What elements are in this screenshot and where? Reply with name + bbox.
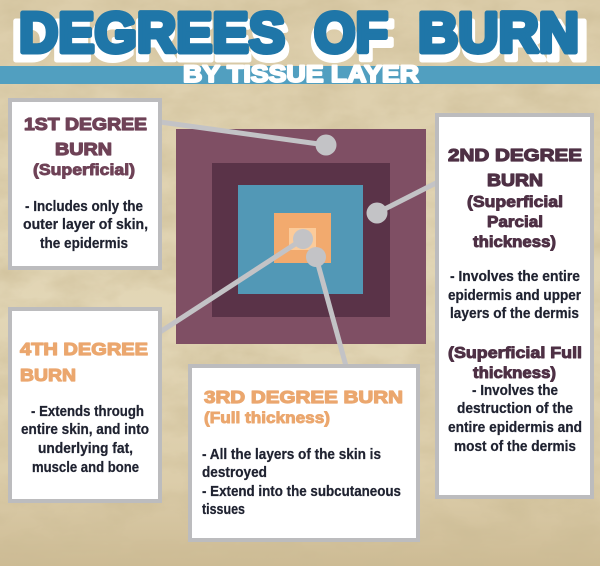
- title: DEGREES: [12, 9, 289, 73]
- panel: 4th degree burn: [10, 309, 160, 501]
- body text: full thickness: - Involves the: [472, 383, 558, 399]
- body text: partial thickness: layers of the dermis: [450, 306, 579, 322]
- body text: full thickness: entire epidermis and: [448, 420, 582, 436]
- body text: 3rd degree: - Extend into the subcutaneous: [202, 484, 401, 500]
- body text: 4th degree: entire skin, and into: [21, 422, 149, 438]
- body text: partial thickness: - Involves the entire: [450, 269, 580, 285]
- body text: 3rd degree: destroyed: [202, 465, 267, 481]
- title: BURN: [418, 9, 588, 73]
- body text: full thickness: [448, 383, 582, 455]
- heading: 4th degree: [20, 339, 148, 385]
- panel: 1st degree burn: [10, 100, 160, 268]
- body text: 3rd degree: tissues: [202, 502, 245, 518]
- heading: 4th degree: 4TH DEGREE: [20, 339, 148, 359]
- body text: partial thickness: [448, 269, 581, 322]
- title: [12, 1, 588, 73]
- title: BURN: [418, 1, 579, 65]
- heading: 3rd degree: [204, 387, 403, 427]
- title: OF: [314, 1, 388, 65]
- body text: full thickness: destruction of the: [457, 401, 573, 417]
- heading: 2nd degree: [448, 145, 582, 251]
- heading: 3rd degree: (Full thickness): [204, 410, 330, 427]
- heading: 1st degree: (Superficial): [33, 162, 135, 179]
- heading: 2nd degree: thickness): [473, 234, 556, 251]
- title: OF: [311, 9, 394, 73]
- subheading: superficial full thickness: thickness): [473, 365, 556, 382]
- connector: 4th degree: [160, 229, 313, 332]
- heading: 1st degree: 1ST DEGREE: [24, 114, 147, 134]
- body text: 1st degree: - Includes only the: [25, 199, 143, 215]
- body text: 4th degree: [21, 404, 149, 476]
- body text: 4th degree: muscle and bone: [32, 460, 139, 476]
- body text: 3rd degree: [202, 447, 401, 518]
- body text: 4th degree: - Extends through: [31, 404, 144, 420]
- heading: 2nd degree: 2ND DEGREE: [448, 145, 582, 165]
- heading: 2nd degree: (Superficial: [467, 194, 563, 211]
- title: DEGREES: [19, 1, 285, 65]
- body text: 1st degree: the epidermis: [40, 236, 128, 252]
- connector: 2nd degree: [366, 183, 436, 224]
- heading: 4th degree: BURN: [20, 365, 76, 385]
- heading: 2nd degree: BURN: [487, 170, 543, 190]
- subheading: superficial full thickness: (Superficial Full: [448, 345, 582, 362]
- body text: partial thickness: epidermis and upper: [448, 288, 581, 304]
- heading: 1st degree: [24, 114, 147, 179]
- heading: 1st degree: BURN: [55, 139, 112, 159]
- body text: 1st degree: [23, 199, 148, 252]
- heading: 3rd degree: 3RD DEGREE BURN: [204, 387, 403, 407]
- body text: full thickness: most of the dermis: [454, 439, 576, 455]
- body text: 3rd degree: - All the layers of the skin is: [202, 447, 381, 463]
- subtitle band: BY TISSUE LAYER: [183, 61, 419, 88]
- connector: 3rd degree: [306, 247, 346, 366]
- subtitle band: [0, 61, 600, 88]
- panel: 2nd degree burn: [437, 115, 592, 497]
- body text: 1st degree: outer layer of skin,: [23, 217, 148, 233]
- panel: 3rd degree burn: [190, 366, 418, 540]
- subheading: superficial full thickness: [448, 345, 582, 382]
- heading: 2nd degree: Parcial: [487, 214, 543, 231]
- nested squares diagram: [176, 129, 426, 344]
- connector: 1st degree: [160, 122, 336, 156]
- body text: 4th degree: underlying fat,: [38, 441, 133, 457]
